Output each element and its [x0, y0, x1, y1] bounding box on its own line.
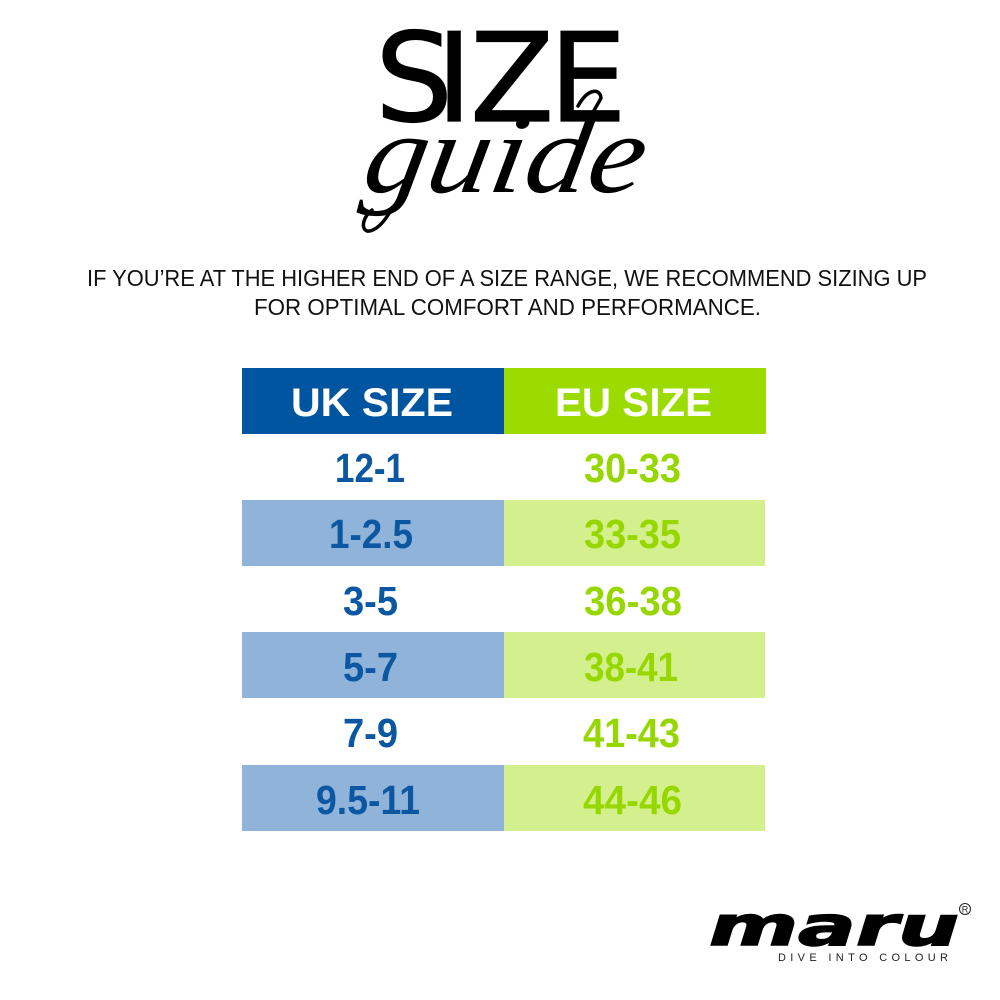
row 4: 5-7: [343, 644, 398, 690]
header: UK size: UK SIZE: [291, 381, 453, 425]
row 5: [343, 710, 680, 756]
registered mark: [960, 904, 970, 914]
header: UK size: [242, 368, 504, 434]
row 2: 33-35: [584, 511, 681, 557]
registered mark: R: [962, 904, 969, 914]
flourish: d ascender loop: [578, 91, 601, 118]
row 4: 38-41: [584, 644, 678, 690]
row 3: 36-38: [584, 578, 682, 624]
title: SIZE: SIZE: [375, 8, 627, 151]
row 5: 7-9: [343, 710, 398, 756]
row 1: [335, 445, 681, 491]
header: EU size: [504, 368, 766, 434]
row 6: [242, 765, 765, 831]
header: EU size: EU SIZE: [555, 381, 712, 425]
title: guide script: guide: [356, 91, 658, 217]
row 1: 30-33: [584, 445, 681, 491]
flourish: g descender tail: [363, 208, 392, 231]
row 6: 9.5-11: [316, 777, 420, 823]
tagline: DIVE INTO COLOUR: [778, 952, 948, 964]
recommendation text: [87, 265, 927, 320]
row 4: [242, 632, 765, 698]
row 2: [242, 500, 765, 566]
row 6: 44-46: [583, 777, 682, 823]
row 5: 41-43: [583, 710, 680, 756]
logo: maru: [709, 895, 970, 964]
row 3: 3-5: [343, 578, 398, 624]
row 3: [343, 578, 682, 624]
row 2: 1-2.5: [329, 511, 413, 557]
row 1: 12-1: [335, 445, 405, 491]
recommendation text: IF YOU’RE AT THE HIGHER END OF A SIZE RANGE, WE RECOMMEND SIZING UP: [87, 265, 927, 291]
logo: maru: maru: [709, 895, 959, 958]
recommendation text: FOR OPTIMAL COMFORT AND PERFORMANCE.: [254, 294, 761, 320]
size table: [242, 368, 766, 831]
